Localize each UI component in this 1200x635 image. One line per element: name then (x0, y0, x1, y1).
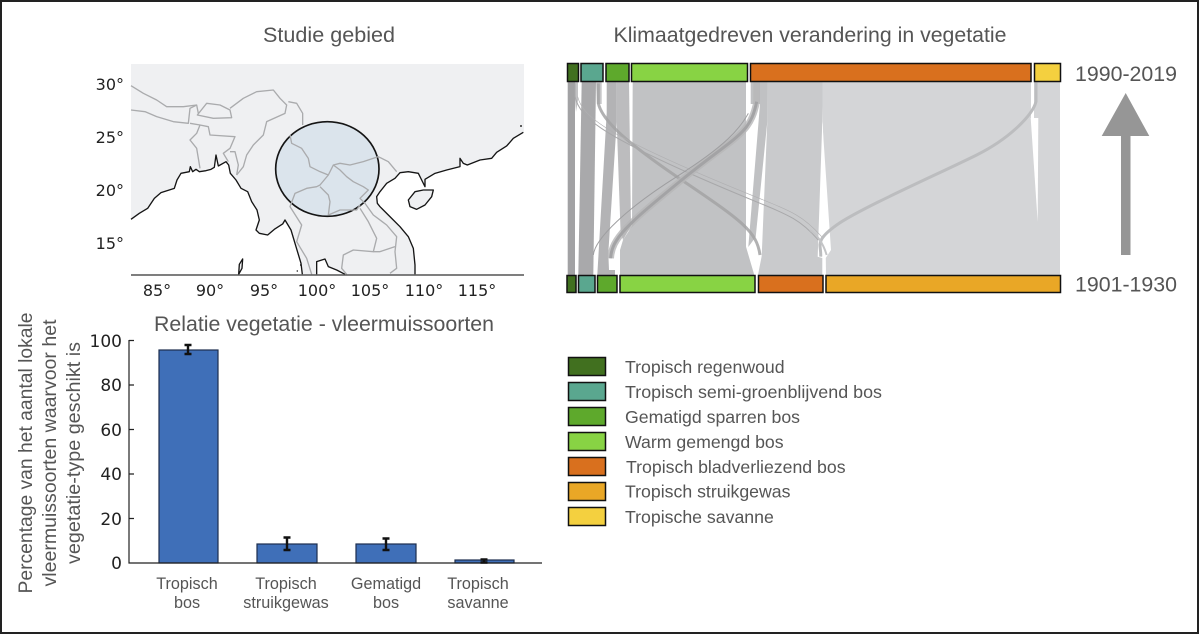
x category labels (156, 575, 509, 612)
legend (568, 357, 882, 527)
longitude labels: 95° (250, 281, 278, 300)
y-axis title: Percentage van het aantal lokale (15, 312, 37, 594)
y tick labels: 80 (100, 376, 122, 396)
longitude labels: 85° (143, 281, 171, 300)
y tick labels: 0 (111, 554, 122, 574)
y tick labels: 40 (100, 465, 122, 485)
heading: study area: Studie gebied (263, 23, 395, 47)
y tick labels: 20 (100, 510, 122, 530)
white gaps between flows (1031, 118, 1038, 222)
longitude labels: 100° (298, 281, 336, 300)
axis ticks (129, 340, 134, 518)
y-axis title (15, 312, 85, 594)
latitude labels: 15° (96, 234, 124, 253)
x category labels: struikgewas (243, 594, 329, 612)
heading: bar chart: Relatie vegetatie - vleermuissoorten (154, 313, 494, 336)
x category labels: Gematigd (351, 575, 421, 593)
label: 1990-2019: 1990-2019 (1075, 62, 1177, 86)
top bars 1990-2019 (568, 64, 1060, 82)
y-axis title: vleermuissoorten waarvoor het (39, 319, 61, 586)
y tick labels: 100 (90, 332, 122, 352)
longitude labels: 90° (196, 281, 224, 300)
x category labels: savanne (447, 594, 509, 612)
legend labels: Tropisch struikgewas (625, 482, 791, 502)
heading: vegetation change: Klimaatgedreven verandering in vegetatie (614, 23, 1006, 47)
map axis line (131, 274, 524, 276)
x category labels: bos (174, 594, 200, 612)
bars (159, 350, 514, 563)
legend labels: Tropische savanne (625, 507, 774, 527)
arrow: time direction (1102, 93, 1149, 255)
x category labels: Tropisch (447, 575, 509, 593)
sankey crossing curves, left (575, 82, 822, 258)
y tick labels (90, 332, 122, 574)
axes (129, 340, 542, 563)
y-axis title: vegetatie-type geschikt is (63, 342, 85, 564)
legend labels (625, 357, 882, 527)
legend labels: Warm gemengd bos (625, 432, 784, 452)
longitude labels (143, 281, 496, 300)
legend labels: Tropisch bladverliezend bos (626, 457, 846, 477)
longitude labels: 110° (405, 281, 443, 300)
x category labels: Tropisch (156, 575, 218, 593)
study area circle (276, 122, 379, 216)
latitude labels: 30° (96, 75, 124, 94)
error bars (184, 345, 488, 562)
x category labels: bos (373, 594, 399, 612)
chart: sankey vegetation flows (567, 64, 1060, 292)
label: 1901-1930: 1901-1930 (1075, 272, 1177, 296)
latitude labels: 25° (96, 128, 124, 147)
longitude labels: 105° (351, 281, 389, 300)
y tick labels: 60 (100, 421, 122, 441)
latitude labels: 20° (96, 181, 124, 200)
legend swatches (568, 358, 606, 526)
sankey flow bands (568, 81, 1060, 275)
chart: bat species bars (90, 332, 542, 612)
map: land and sea (131, 64, 524, 274)
sankey crossing curve, right (810, 82, 1036, 257)
longitude labels: 115° (458, 281, 496, 300)
bottom bars 1901-1930 (567, 276, 1060, 292)
x category labels: Tropisch (255, 575, 317, 593)
legend labels: Tropisch semi-groenblijvend bos (625, 382, 882, 402)
legend labels: Gematigd sparren bos (625, 407, 800, 427)
latitude labels (96, 75, 124, 253)
legend labels: Tropisch regenwoud (625, 357, 785, 377)
panel: study area map (96, 64, 524, 300)
